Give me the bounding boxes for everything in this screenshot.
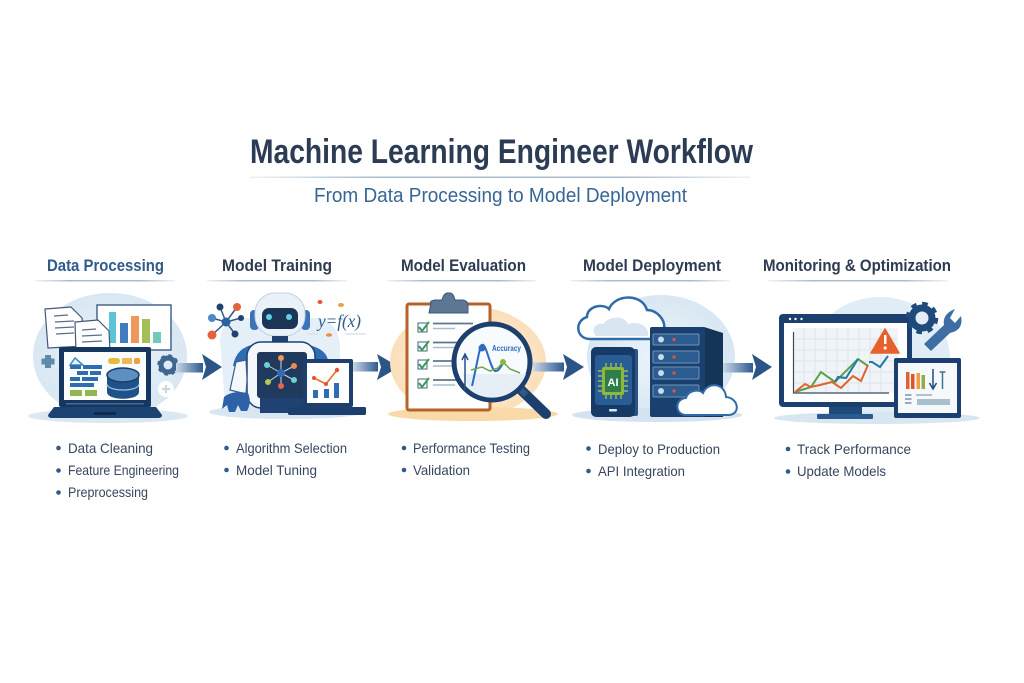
icon: laptop with data bbox=[28, 293, 188, 423]
phone bbox=[591, 347, 638, 417]
heading: model training: Model Training bbox=[222, 256, 332, 275]
formula: y=f(x) bbox=[316, 311, 361, 332]
magnifier label: Accuracy bbox=[492, 344, 521, 353]
bullet list: Track Performance bbox=[797, 441, 911, 457]
arrow 2 bbox=[353, 354, 399, 380]
bullet list: Algorithm Selection bbox=[236, 440, 347, 456]
icon: plus bbox=[42, 355, 54, 368]
icon: gear bbox=[159, 356, 177, 374]
small cloud bbox=[677, 385, 737, 415]
arrow 3 bbox=[533, 354, 584, 380]
large cloud bbox=[578, 298, 664, 339]
tablet bbox=[894, 358, 961, 418]
chest network bbox=[264, 355, 297, 389]
icon: cloud, phone and server bbox=[572, 295, 742, 422]
title: Machine Learning Engineer Workflow bbox=[250, 133, 753, 171]
step 3: model evaluation bbox=[387, 256, 558, 478]
formula accents bbox=[308, 300, 366, 337]
bullet list: Preprocessing bbox=[68, 484, 148, 500]
wrench bbox=[924, 309, 962, 351]
bullet list: Performance Testing bbox=[413, 440, 530, 456]
step 1: data processing bbox=[28, 256, 188, 500]
gear bbox=[908, 304, 936, 332]
bullet list bbox=[224, 440, 347, 478]
heading: monitoring and optimization: Monitoring & Optimization bbox=[763, 256, 951, 275]
heading: model deployment: Model Deployment bbox=[583, 256, 721, 275]
heading: data processing: Data Processing bbox=[47, 256, 164, 275]
bullet list bbox=[786, 441, 911, 479]
monitor bbox=[779, 314, 912, 407]
bullet list bbox=[586, 441, 720, 479]
arrow 4 bbox=[723, 354, 772, 380]
chip label: AI bbox=[608, 377, 618, 389]
bullet list: API Integration bbox=[598, 463, 685, 479]
subtitle: From Data Processing to Model Deployment bbox=[314, 185, 687, 207]
checklist bbox=[418, 322, 473, 388]
magnifier bbox=[454, 324, 546, 414]
arrow 1 bbox=[176, 354, 222, 380]
clip bbox=[429, 293, 468, 313]
warning triangle bbox=[871, 329, 899, 353]
bullet list: Deploy to Production bbox=[598, 441, 720, 457]
heading: model evaluation: Model Evaluation bbox=[401, 256, 526, 275]
bullet list: Model Tuning bbox=[236, 462, 317, 478]
icon: monitor, gear, wrench and tablet bbox=[774, 297, 980, 424]
bullet list: Validation bbox=[413, 462, 470, 478]
bullet list: Data Cleaning bbox=[68, 440, 153, 456]
bullet list bbox=[56, 440, 179, 500]
bullet list: Update Models bbox=[797, 463, 886, 479]
network diagram bbox=[208, 303, 244, 340]
step 2: model training bbox=[207, 256, 366, 478]
laptop with chart bbox=[288, 359, 366, 415]
bullet list: Feature Engineering bbox=[68, 462, 179, 478]
step 5: monitoring and optimization bbox=[763, 256, 980, 479]
icon: robot bbox=[208, 293, 366, 419]
icon: clipboard and magnifier bbox=[388, 293, 558, 421]
step 4: model deployment bbox=[570, 256, 742, 479]
bullet list bbox=[402, 440, 530, 478]
server rack bbox=[650, 327, 723, 417]
